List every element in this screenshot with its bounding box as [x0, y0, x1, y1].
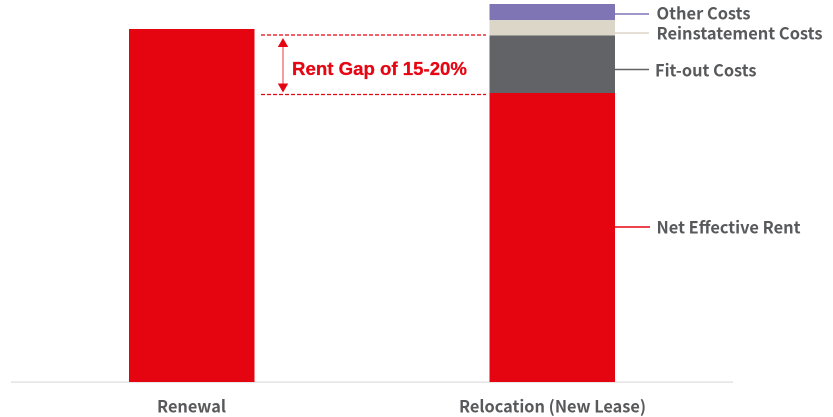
segment: Reinstatement Costs — [490, 20, 615, 36]
dashed line: top of gap — [261, 34, 486, 36]
label: Rent Gap of 15-20%: Rent Gap of 15-20% — [292, 59, 467, 79]
callout: Other Costs: Other Costs — [656, 0, 750, 24]
dashed line: bottom of gap — [261, 94, 486, 96]
callout: Net Effective Rent: Net Effective Rent — [656, 214, 801, 238]
stacked bar: Relocation (New Lease) — [490, 4, 615, 382]
arrow: double-headed gap arrow — [278, 38, 288, 92]
segment: Fit-out Costs — [490, 36, 615, 93]
bar: Renewal — [129, 29, 254, 382]
callout: Other Costs — [615, 0, 750, 24]
segment: Net Effective Rent — [490, 93, 615, 382]
segment: Other Costs — [490, 4, 615, 20]
callout: Fit-out Costs: Fit-out Costs — [655, 58, 756, 82]
axis label: Renewal: Renewal — [157, 394, 226, 417]
axis label: Relocation (New Lease): Relocation (New Lease) — [459, 394, 646, 417]
callout: Reinstatement Costs: Reinstatement Costs — [656, 20, 822, 44]
rent gap annotation — [261, 35, 486, 94]
